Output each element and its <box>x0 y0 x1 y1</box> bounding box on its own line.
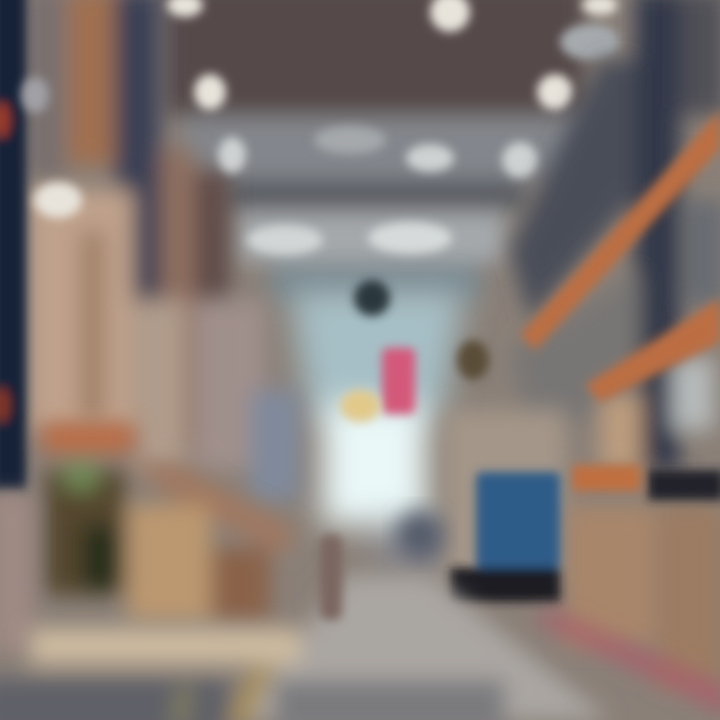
blue container <box>450 472 560 602</box>
ceiling lights <box>21 0 620 255</box>
dark yellow lamp <box>457 340 489 380</box>
dark cart <box>396 511 444 559</box>
right lower boxes <box>565 505 720 685</box>
ceiling <box>165 0 595 302</box>
right shelf beam <box>572 465 720 500</box>
right orange beams <box>520 110 720 402</box>
left navy upright <box>0 0 26 490</box>
floor <box>0 575 720 720</box>
yellow shape <box>340 390 380 422</box>
pink box <box>382 348 415 414</box>
left racking <box>25 0 300 500</box>
center accent objects <box>320 280 489 620</box>
far end of aisle <box>290 290 465 570</box>
dark lamp <box>354 280 390 316</box>
worker <box>320 535 342 620</box>
right racking <box>445 0 720 580</box>
left orange beam and lower shelves <box>0 425 295 650</box>
